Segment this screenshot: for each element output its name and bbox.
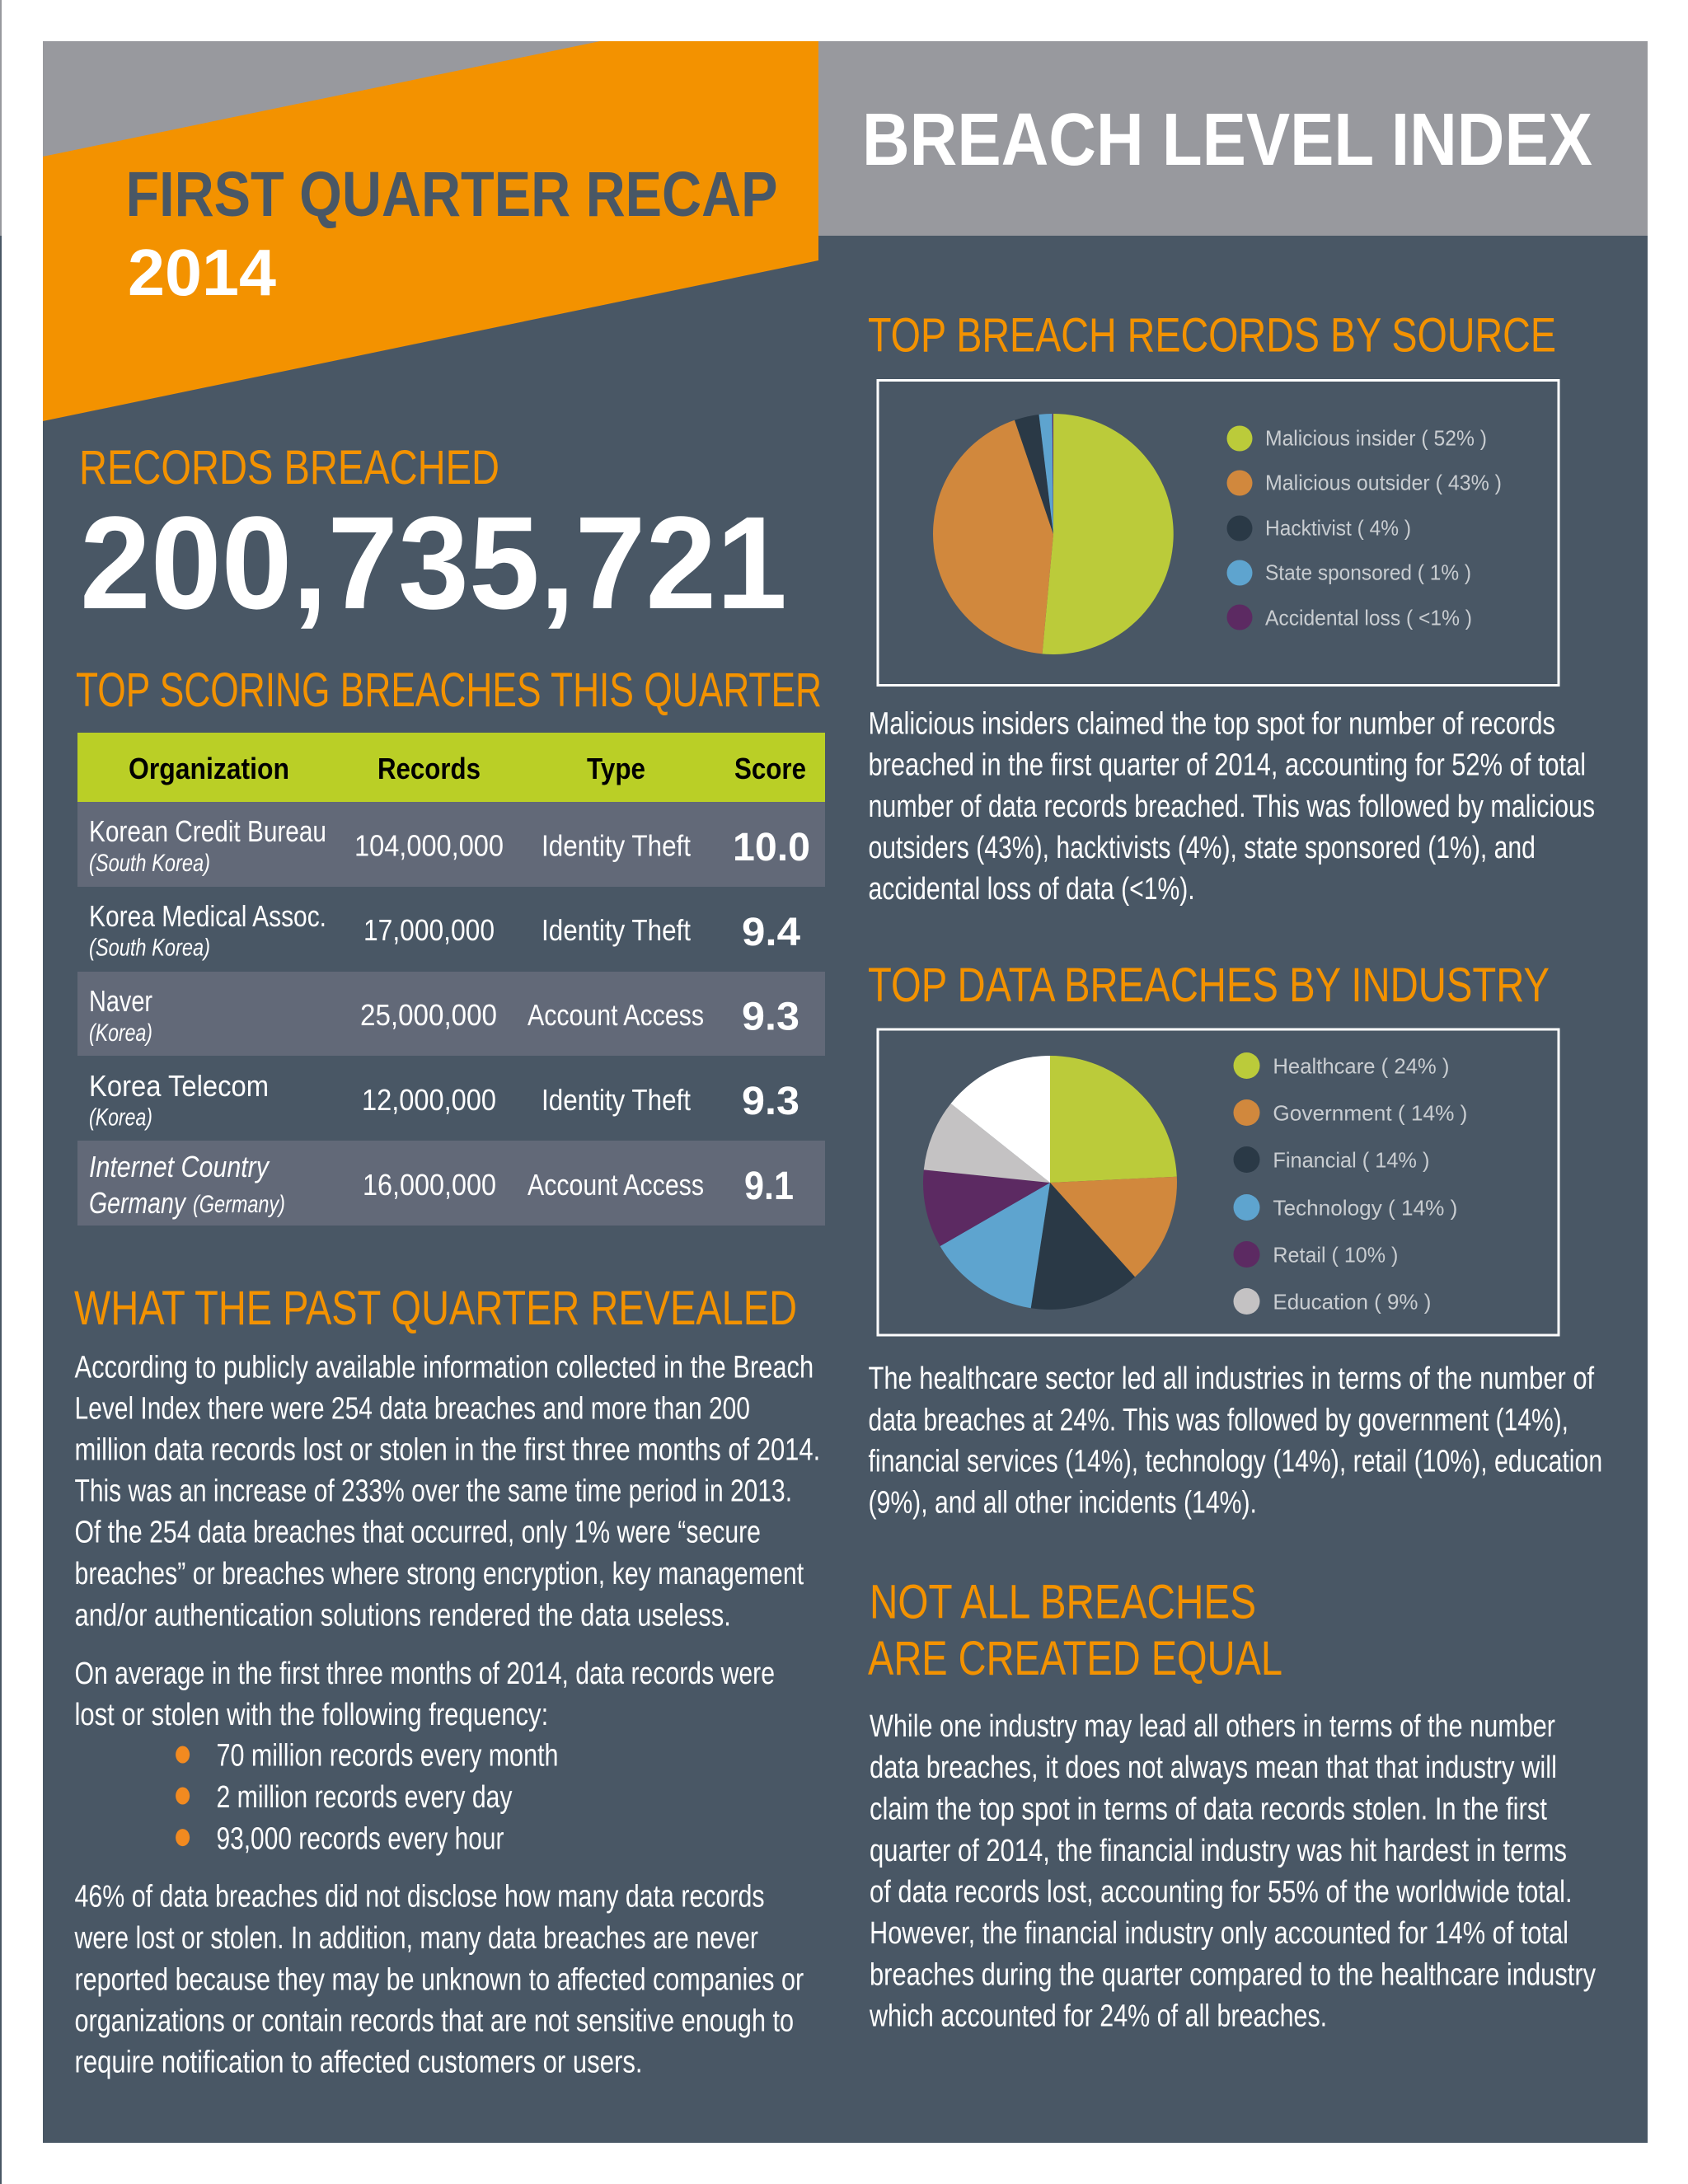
- table row: Internet Country Germany: [77, 1141, 825, 1226]
- table row: Internet Country Germany: (Germany): [193, 1191, 285, 1218]
- table header row: [77, 733, 825, 802]
- legend: breaches by industry: Government ( 14% ): [1273, 1101, 1467, 1126]
- legend: records by source: Hacktivist ( 4% ): [1265, 516, 1411, 541]
- text block: quarter overview: According to publicly available information collected in the Breach: [75, 1351, 814, 1385]
- bullet list: frequency: 93,000 records every hour: [216, 1821, 504, 1856]
- panel: industry chart box: [878, 1029, 1559, 1335]
- table row: Korea Telecom: (Korea): [89, 1104, 152, 1131]
- bullet list: frequency: 2 million records every day: [216, 1780, 513, 1815]
- legend: records by source: State sponsored ( 1% ): [1265, 560, 1471, 585]
- text block: quarter overview: Of the 254 data breaches that occurred, only 1% were “secure: [75, 1516, 761, 1549]
- table header row: Score: [734, 752, 806, 785]
- table row: Naver: [77, 972, 825, 1056]
- table row: Korean Credit Bureau: [77, 802, 825, 887]
- table header row: Organization: [129, 752, 289, 785]
- table row: Internet Country Germany: Germany: [89, 1186, 187, 1220]
- text block: frequency intro: [74, 1657, 775, 1732]
- bullet list: frequency: 70 million records every month: [216, 1739, 559, 1774]
- table row: Internet Country Germany: 9.1: [744, 1165, 794, 1208]
- legend: breaches by industry: [1233, 1052, 1467, 1315]
- table row: Korean Credit Bureau: 104,000,000: [354, 829, 504, 862]
- heading: not all breaches are created equal: ARE CREATED EQUAL: [868, 1632, 1282, 1685]
- legend: records by source: [1226, 425, 1502, 630]
- table row: Korean Credit Bureau: (South Korea): [89, 850, 210, 877]
- legend: breaches by industry: Healthcare ( 24% ): [1273, 1053, 1449, 1078]
- heading: records breached: RECORDS BREACHED: [79, 441, 499, 494]
- text block: quarter overview: million data records lost or stolen in the first three months of 2014.: [75, 1433, 820, 1467]
- pie chart: breaches by industry: [923, 1056, 1177, 1310]
- text block: undisclosed breaches: 46% of data breaches did not disclose how many data records: [75, 1880, 765, 1914]
- table header row: Type: [587, 752, 645, 785]
- table row: Korea Medical Assoc.: Korea Medical Assoc.: [89, 899, 326, 933]
- table row: Korean Credit Bureau: Korean Credit Bureau: [89, 814, 326, 848]
- text block: industry summary: (9%), and all other incidents (14%).: [869, 1486, 1257, 1520]
- table row: Naver: 25,000,000: [360, 998, 497, 1032]
- big number: records breached: 200,735,721: [80, 489, 787, 636]
- text block: quarter overview: and/or authentication solutions rendered the data useless.: [75, 1599, 731, 1633]
- heading: top data breaches by industry: TOP DATA BREACHES BY INDUSTRY: [868, 958, 1550, 1012]
- text block: undisclosed breaches: organizations or contain records that are not sensitive enough to: [75, 2004, 794, 2038]
- legend: records by source: Accidental loss ( <1% ): [1265, 605, 1472, 630]
- text block: source summary: [869, 707, 1595, 907]
- table row: Korea Telecom: Identity Theft: [542, 1083, 691, 1117]
- table row: Korea Medical Assoc.: (South Korea): [89, 935, 210, 961]
- table row: Korea Telecom: 9.3: [742, 1080, 799, 1123]
- table row: Korea Medical Assoc.: [89, 899, 800, 961]
- table row: Internet Country Germany: Account Access: [528, 1168, 704, 1202]
- table row: Internet Country Germany: Internet Country: [89, 1150, 270, 1183]
- heading: top scoring breaches: TOP SCORING BREACHES THIS QUARTER: [76, 663, 822, 717]
- table row: Internet Country Germany: 16,000,000: [363, 1168, 496, 1202]
- heading: not all breaches are created equal: NOT ALL BREACHES: [870, 1576, 1256, 1629]
- text block: quarter overview: [74, 1351, 820, 1633]
- table row: Korean Credit Bureau: 10.0: [733, 826, 810, 869]
- text block: source summary: accidental loss of data (<1%).: [869, 872, 1195, 907]
- legend: breaches by industry: Financial ( 14% ): [1273, 1147, 1429, 1172]
- text block: not all breaches equal: [869, 1709, 1596, 2034]
- text block: undisclosed breaches: reported because they may be unknown to affected companies or: [75, 1963, 804, 1997]
- legend: records by source: Malicious outsider ( 43% ): [1265, 470, 1502, 494]
- header: grey band: [43, 41, 1648, 236]
- table: top scoring breaches: [77, 733, 825, 1226]
- text block: industry summary: [869, 1361, 1602, 1520]
- text block: quarter overview: This was an increase of 233% over the same time period in 2013.: [75, 1474, 792, 1508]
- heading: what the past quarter revealed: WHAT THE PAST QUARTER REVEALED: [74, 1282, 797, 1335]
- text block: undisclosed breaches: require notification to affected customers or users.: [75, 2046, 643, 2079]
- panel: source chart box: [878, 381, 1559, 686]
- pie chart: records by source: [933, 414, 1174, 654]
- heading: not all breaches are created equal: [868, 1576, 1282, 1685]
- title: breach level index: BREACH LEVEL INDEX: [862, 99, 1592, 181]
- text block: not all breaches equal: claim the top spot in terms of data records stolen. In the first: [870, 1793, 1547, 1827]
- text block: frequency intro: lost or stolen with the following frequency:: [75, 1698, 548, 1732]
- text block: undisclosed breaches: [74, 1880, 804, 2079]
- legend: breaches by industry: Retail ( 10% ): [1273, 1243, 1398, 1268]
- title: first quarter recap: FIRST QUARTER RECAP: [125, 159, 778, 230]
- table header row: Records: [377, 752, 481, 785]
- table row: Naver: Account Access: [528, 998, 704, 1032]
- bullet list: frequency: [176, 1739, 559, 1856]
- text block: undisclosed breaches: were lost or stolen. In addition, many data breaches are never: [74, 1921, 758, 1956]
- table row: Korea Medical Assoc.: Identity Theft: [542, 913, 691, 947]
- legend: breaches by industry: Technology ( 14% ): [1273, 1195, 1457, 1220]
- legend: breaches by industry: Education ( 9% ): [1273, 1289, 1431, 1314]
- legend: records by source: Malicious insider ( 52% ): [1265, 425, 1487, 450]
- text block: source summary: outsiders (43%), hacktivists (4%), state sponsored (1%), and: [869, 831, 1536, 865]
- text block: quarter overview: Level Index there were 254 data breaches and more than 200: [75, 1392, 750, 1426]
- table row: Korea Telecom: Korea Telecom: [89, 1069, 269, 1103]
- title: first quarter recap: [125, 159, 778, 309]
- table row: Korea Telecom: [89, 1069, 799, 1131]
- title: first quarter recap: 2014: [128, 236, 277, 309]
- table row: Naver: Naver: [89, 984, 152, 1018]
- table row: Naver: (Korea): [89, 1019, 152, 1047]
- text block: quarter overview: breaches” or breaches where strong encryption, key management: [75, 1557, 804, 1591]
- table row: Korean Credit Bureau: Identity Theft: [542, 829, 691, 862]
- header: orange banner: [43, 41, 818, 421]
- table row: Korea Medical Assoc.: 9.4: [742, 911, 800, 954]
- table row: Naver: 9.3: [742, 996, 799, 1038]
- text block: not all breaches equal: which accounted for 24% of all breaches.: [869, 1999, 1327, 2034]
- table row: Korea Medical Assoc.: 17,000,000: [363, 913, 495, 947]
- text block: frequency intro: On average in the first three months of 2014, data records were: [75, 1657, 775, 1691]
- table row: Korea Telecom: 12,000,000: [362, 1083, 496, 1117]
